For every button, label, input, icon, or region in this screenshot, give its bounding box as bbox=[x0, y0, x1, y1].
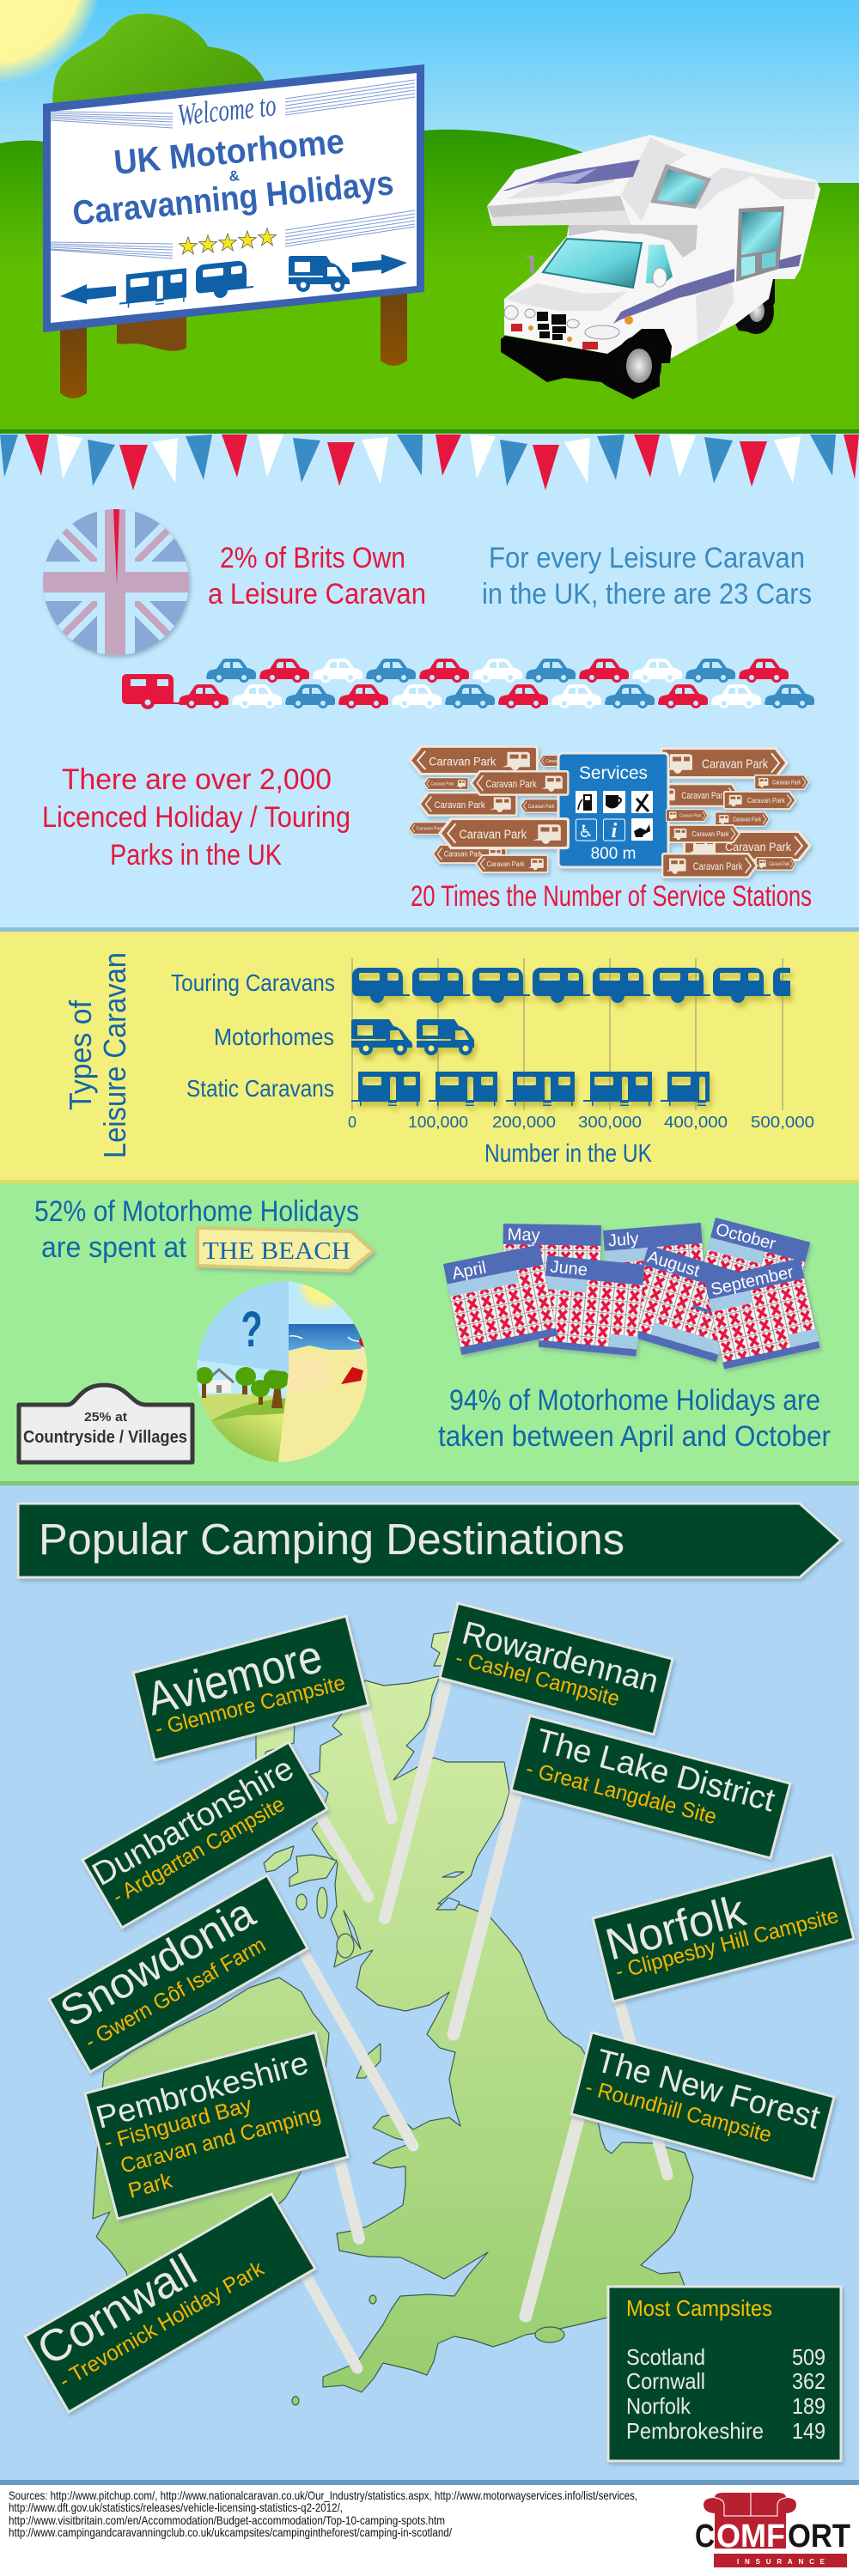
countryside sign: Countryside / Villages bbox=[23, 1428, 187, 1447]
bumper and front shadow bbox=[501, 329, 672, 399]
caravan park signs behind the services sign: Caravan Park bbox=[545, 759, 570, 764]
section header: popular camping destinations bbox=[18, 1504, 841, 1577]
bucket and spade bbox=[341, 1338, 364, 1384]
axis tick labels: 0 bbox=[348, 1114, 356, 1131]
sign title line 2: Caravanning Holidays bbox=[71, 164, 395, 233]
sign posts on map bbox=[304, 1680, 667, 2368]
caravan park signs behind the services sign: Caravan Park bbox=[528, 803, 555, 810]
rolling green hills bbox=[0, 130, 859, 434]
sign: Norfolk: - Clippesby Hill Campsite bbox=[612, 1904, 841, 1984]
caravan park and services signs bbox=[408, 745, 812, 878]
most campsites table bbox=[608, 2287, 841, 2461]
union flag pie chart bbox=[43, 509, 189, 655]
stat: cars per caravan bbox=[482, 542, 812, 611]
sun bbox=[0, 0, 103, 84]
wing mirror bbox=[527, 255, 534, 273]
calendar: April: April bbox=[450, 1258, 488, 1284]
chart title bbox=[63, 952, 132, 1158]
door window bbox=[646, 245, 673, 283]
firths and sea lochs bbox=[344, 1872, 464, 1949]
the beach sign: THE BEACH bbox=[203, 1237, 350, 1265]
most campsites table: Norfolk bbox=[626, 2393, 691, 2419]
bunting flags bbox=[0, 434, 836, 486]
touring caravan icon bbox=[196, 259, 253, 301]
sign: Rowardennan bbox=[440, 1603, 673, 1735]
caravan park signs in front of the services sign: Caravan Park bbox=[679, 813, 702, 819]
axis tick labels: 500,000 bbox=[751, 1114, 814, 1131]
sign: Dunbartonshire bbox=[82, 1742, 327, 1928]
most campsites table: Cornwall bbox=[626, 2368, 705, 2394]
sign: Pembrokeshire: Pembrokeshire bbox=[92, 2044, 312, 2136]
service icons: ♿ bbox=[578, 821, 594, 841]
sign: Norfolk bbox=[593, 1855, 854, 2002]
sign: Pembrokeshire: - Fishguard Bay bbox=[101, 2093, 254, 2155]
sign: Snowdonia: - Gwern Gôf Isaf Farm bbox=[81, 1933, 270, 2054]
most campsites table: 509 bbox=[792, 2344, 825, 2370]
caravan park signs in front of the services sign: Caravan Park bbox=[693, 861, 743, 872]
static caravan icon bbox=[119, 268, 186, 309]
countryside sign bbox=[19, 1385, 192, 1462]
stat: april to october bbox=[438, 1384, 831, 1453]
stat: cars per caravan: in the UK, there are 23 Cars bbox=[482, 578, 812, 611]
sign: Rowardennan: - Cashel Campsite bbox=[453, 1646, 622, 1711]
sandcastle bbox=[288, 1354, 332, 1394]
caravan park signs behind the services sign bbox=[408, 745, 812, 873]
sign: The Lake District: The Lake District bbox=[533, 1722, 779, 1820]
motorhome icon bbox=[289, 256, 350, 292]
caravan park signs behind the services sign: Caravan Park bbox=[725, 840, 792, 854]
calendar: May: May bbox=[508, 1225, 540, 1245]
body shading bbox=[492, 137, 816, 343]
caravan park signs in front of the services sign: Caravan Park bbox=[691, 830, 729, 838]
ampersand: & bbox=[228, 167, 241, 185]
most campsites table: 362 bbox=[792, 2368, 825, 2394]
sofa icon bbox=[704, 2493, 796, 2549]
stat: motorhome holidays at the beach bbox=[34, 1195, 359, 1264]
chart title: Leisure Caravan bbox=[97, 952, 132, 1158]
comfort insurance logo bbox=[695, 2493, 850, 2567]
stat: brits own: a Leisure Caravan bbox=[208, 578, 426, 611]
rear wheel bbox=[734, 276, 775, 334]
stat: cars per caravan: For every Leisure Caravan bbox=[489, 542, 805, 574]
sign: Dunbartonshire: Dunbartonshire bbox=[87, 1751, 300, 1893]
front wheel bbox=[615, 336, 661, 394]
sign: Aviemore: Aviemore bbox=[141, 1629, 327, 1726]
stat: motorhome holidays at the beach: are spent at bbox=[41, 1231, 187, 1264]
small southern islands bbox=[292, 2295, 376, 2405]
sources: http://www.dft.gov.uk/statistics/releases/vehicle-licensing-statistics-q2-2012/, bbox=[9, 2500, 343, 2514]
sign: Norfolk: Norfolk bbox=[600, 1886, 752, 1971]
calendar: October bbox=[692, 1218, 810, 1332]
caravan park signs in front of the services sign: Caravan Park bbox=[485, 780, 537, 790]
motorhome illustration bbox=[487, 135, 820, 399]
door mirror bbox=[653, 268, 667, 287]
service icons: i bbox=[612, 820, 618, 842]
services sign: 800 m bbox=[591, 845, 636, 863]
caravan park signs behind the services sign: Caravan Park bbox=[434, 800, 485, 811]
calendar: August bbox=[622, 1245, 743, 1362]
sign: The New Forest bbox=[571, 2032, 834, 2179]
left arrow bbox=[60, 284, 116, 304]
sign: Aviemore bbox=[133, 1616, 369, 1760]
category labels bbox=[171, 969, 335, 1102]
caravan park signs behind the services sign: Caravan Park bbox=[430, 781, 454, 787]
trees bbox=[196, 1367, 289, 1408]
isle of wight bbox=[535, 2327, 564, 2342]
caravan park signs in front of the services sign: Caravan Park bbox=[459, 829, 527, 842]
section header: popular camping destinations: Popular Camping Destinations bbox=[39, 1515, 624, 1564]
headlights and indicators bbox=[504, 306, 633, 349]
welcome sign bbox=[43, 64, 424, 332]
side window bbox=[736, 206, 784, 282]
sign: Cornwall bbox=[25, 2194, 315, 2412]
decorative stripes bbox=[51, 80, 415, 258]
caravan park signs behind the services sign: Caravan Park bbox=[772, 780, 801, 787]
windscreen bbox=[543, 239, 642, 288]
sign: The New Forest: - Roundhill Campsite bbox=[582, 2075, 774, 2148]
wordmark: C bbox=[695, 2518, 715, 2555]
caravan park signs behind the services sign: Caravan Park bbox=[429, 755, 496, 768]
sources: http://www.visitbritain.com/en/Accommodation/Budget-accommodation/Top-10-camping-spots.htm bbox=[9, 2513, 445, 2527]
grey behind cab bbox=[569, 225, 698, 258]
caravan park signs behind the services sign: Caravan Park bbox=[417, 827, 443, 832]
most campsites table: Scotland bbox=[626, 2344, 705, 2370]
calendar: October: October bbox=[714, 1220, 778, 1254]
calendar: May bbox=[502, 1224, 601, 1318]
stat: brits own bbox=[208, 542, 426, 611]
calendar: June: June bbox=[550, 1257, 588, 1280]
right arrow bbox=[352, 254, 407, 274]
category labels: Static Caravans bbox=[186, 1075, 334, 1102]
sign: Snowdonia bbox=[49, 1875, 308, 2072]
sign: Pembrokeshire: Park bbox=[125, 2168, 175, 2203]
sign: Pembrokeshire: Caravan and Camping bbox=[118, 2102, 323, 2178]
calendars bbox=[443, 1218, 820, 1369]
sky bbox=[0, 0, 859, 206]
the beach sign bbox=[196, 1226, 375, 1273]
insurance bar bbox=[714, 2554, 847, 2567]
static caravan bars bbox=[351, 1072, 729, 1106]
stat: motorhome holidays at the beach: 52% of Motorhome Holidays bbox=[34, 1195, 359, 1228]
hero scene bbox=[0, 0, 859, 434]
countryside sign: 25% at bbox=[84, 1410, 127, 1425]
sources: http://www.campingandcaravanningclub.co.uk/ukcampsites/campingintheforest/camping-in-scotland/ bbox=[9, 2525, 452, 2539]
axis tick labels: 300,000 bbox=[578, 1114, 642, 1131]
axis tick labels: 400,000 bbox=[664, 1114, 728, 1131]
stat: licenced parks: There are over 2,000 bbox=[62, 763, 332, 796]
sign: Cornwall: Cornwall bbox=[29, 2245, 205, 2375]
caravan park signs in front of the services sign bbox=[438, 770, 758, 878]
sign: The Lake District: - Great Langdale Site bbox=[523, 1757, 719, 1829]
other slice bbox=[198, 1281, 289, 1372]
red caravan bbox=[122, 674, 180, 709]
cab roof bbox=[567, 230, 674, 258]
sign: Snowdonia: Snowdonia bbox=[52, 1888, 263, 2037]
calendar strip fragment bbox=[692, 1304, 710, 1314]
calendar: April bbox=[443, 1244, 557, 1355]
sign: The New Forest: The New Forest bbox=[593, 2043, 824, 2136]
grille bbox=[537, 312, 566, 340]
sign: Dunbartonshire: - Ardgartan Campsite bbox=[108, 1792, 289, 1909]
2 percent slice bbox=[113, 509, 119, 584]
category labels: Touring Caravans bbox=[171, 969, 335, 996]
wordmark: OMF bbox=[716, 2518, 785, 2555]
stat: licenced parks: Parks in the UK bbox=[110, 839, 282, 872]
axis tick labels: 200,000 bbox=[492, 1114, 556, 1131]
axis title: Number in the UK bbox=[484, 1139, 652, 1168]
calendar: September: September bbox=[710, 1263, 795, 1299]
bunting bbox=[0, 434, 859, 490]
calendar: August: August bbox=[645, 1248, 702, 1281]
sign: Pembrokeshire bbox=[85, 2032, 348, 2219]
insurance bar: INSURANCE bbox=[737, 2558, 825, 2566]
calendar: June bbox=[539, 1255, 645, 1356]
great britain bbox=[309, 1676, 693, 2392]
stat: licenced parks bbox=[42, 763, 350, 872]
chart title: Types of bbox=[63, 999, 98, 1110]
caravan park signs behind the services sign: Caravan Park bbox=[769, 861, 789, 867]
caravan park signs behind the services sign: Caravan Park bbox=[444, 849, 483, 859]
sources: Sources: http://www.pitchup.com/, http://www.nationalcaravan.co.uk/Our_Industry/statistics.aspx, http://www.motorwayservices.info/list/services, bbox=[9, 2488, 637, 2502]
caravan park signs behind the services sign: Caravan Park bbox=[702, 758, 769, 772]
sign title line 1: UK Motorhome bbox=[113, 123, 346, 182]
sign: Cornwall: - Trevornick Holiday Park bbox=[55, 2257, 268, 2393]
most campsites table: 189 bbox=[792, 2393, 825, 2419]
sign: The Lake District bbox=[511, 1716, 790, 1858]
overcab shadow bbox=[487, 196, 625, 217]
service icons bbox=[576, 791, 653, 842]
wordmark bbox=[695, 2518, 850, 2555]
other slice: ? bbox=[241, 1302, 263, 1358]
sign posts bbox=[60, 288, 407, 398]
caravan park signs behind the services sign: Caravan Park bbox=[747, 797, 786, 805]
body stripe bbox=[613, 254, 801, 324]
touring caravan bars bbox=[352, 968, 831, 1003]
chart: types of leisure caravan bbox=[63, 952, 831, 1168]
grid lines bbox=[352, 958, 783, 1110]
stat: licenced parks: Licenced Holiday / Touring bbox=[42, 801, 350, 834]
stat: brits own: 2% of Brits Own bbox=[220, 542, 405, 574]
caravan park signs behind the services sign: Caravan Park bbox=[733, 817, 762, 823]
caravan and car pictogram bbox=[122, 659, 814, 709]
welcome to: Welcome to bbox=[176, 88, 277, 132]
overcab stripe bbox=[503, 160, 640, 191]
services sign bbox=[558, 753, 668, 867]
northern ireland bbox=[93, 1978, 329, 2318]
calendar: September bbox=[704, 1258, 820, 1369]
most campsites table: Most Campsites bbox=[626, 2295, 772, 2321]
caravan park signs behind the services sign: Caravan Park bbox=[487, 860, 525, 868]
most campsites table: Pembrokeshire bbox=[626, 2418, 764, 2444]
category labels: Motorhomes bbox=[214, 1024, 334, 1050]
isle of man bbox=[356, 2044, 381, 2078]
uk map bbox=[93, 1631, 693, 2405]
sources bbox=[9, 2488, 637, 2539]
calendar: July bbox=[603, 1223, 708, 1323]
rating stars bbox=[179, 228, 277, 254]
services sign: Services bbox=[579, 763, 648, 783]
car rows bbox=[179, 659, 814, 708]
countryside slice bbox=[197, 1360, 289, 1462]
stat: april to october: 94% of Motorhome Holidays are bbox=[449, 1384, 820, 1417]
sign: Aviemore: - Glenmore Campsite bbox=[153, 1671, 348, 1741]
beach slice bbox=[278, 1281, 368, 1462]
caravan park signs behind the services sign: Caravan Park bbox=[681, 791, 727, 801]
wordmark: ORT bbox=[788, 2518, 850, 2555]
main body bbox=[487, 135, 820, 358]
calendar: July: July bbox=[607, 1230, 639, 1251]
scottish islands bbox=[256, 1631, 453, 1958]
upper window bbox=[650, 164, 711, 209]
motorhome bars bbox=[351, 1019, 478, 1055]
most campsites table: 149 bbox=[792, 2418, 825, 2444]
sign: Rowardennan: Rowardennan bbox=[459, 1615, 662, 1700]
axis tick labels: 100,000 bbox=[408, 1114, 468, 1131]
stat: april to october: taken between April and October bbox=[438, 1420, 831, 1453]
tree bbox=[52, 14, 266, 351]
sign board bbox=[43, 64, 424, 332]
house bbox=[204, 1370, 234, 1393]
holiday location pie chart bbox=[197, 1281, 368, 1462]
axis tick labels bbox=[348, 1114, 814, 1131]
